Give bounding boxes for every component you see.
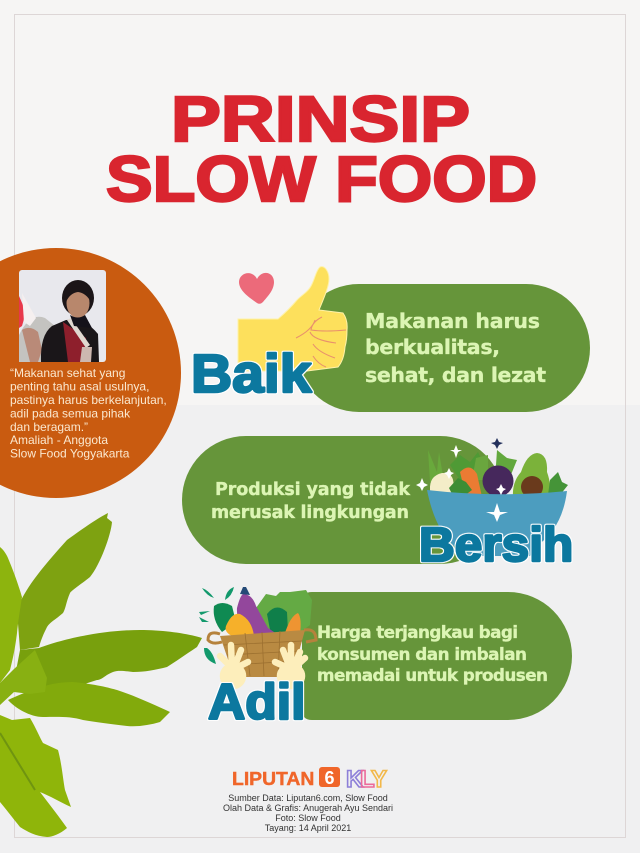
quote text: dan beragam.” [10, 420, 88, 434]
description text: sehat, dan lezat [365, 363, 546, 387]
title: PRINSIP [171, 83, 470, 155]
logo: Liputan6 [232, 767, 340, 790]
icon: vegetable basket [199, 587, 316, 686]
panel: Adil [199, 587, 572, 730]
label: Adil: Adil [208, 674, 305, 730]
pill background [182, 436, 504, 564]
title [106, 83, 537, 215]
pill background [302, 592, 572, 720]
description text: Produksi yang tidak [215, 480, 410, 500]
description text: memadai untuk produsen [317, 665, 548, 685]
quote text: Amaliah - Anggota [10, 433, 108, 447]
credits text [223, 793, 393, 833]
quote text: Slow Food Yogyakarta [10, 446, 130, 460]
photo: Amaliah [19, 270, 106, 362]
description text [365, 309, 546, 387]
logo: KLY [346, 766, 387, 793]
title: SLOW FOOD [106, 144, 537, 215]
sparkles [416, 445, 508, 522]
logo: KLY: L [360, 766, 375, 793]
description text: merusak lingkungan [211, 503, 409, 523]
description text [317, 622, 548, 685]
footer [223, 766, 393, 833]
quote text: pastinya harus berkelanjutan, [10, 393, 167, 407]
panel: Baik [191, 267, 590, 412]
label: Bersih: Bersih [419, 519, 573, 572]
credits text: Foto: Slow Food [275, 813, 341, 823]
credits text: Olah Data & Grafis: Anugerah Ayu Sendari [223, 803, 393, 813]
hands [220, 645, 305, 686]
panel: Bersih [182, 436, 573, 572]
logo: Liputan6: LIPUTAN [232, 769, 314, 790]
decoration: banana leaves [0, 513, 202, 837]
quote text: adil pada semua pihak [10, 406, 131, 420]
logo: Liputan6: 6 [324, 768, 335, 788]
description text: Makanan harus [365, 309, 540, 333]
quote text [10, 366, 167, 460]
credits text: Sumber Data: Liputan6.com, Slow Food [228, 793, 388, 803]
panel: quote circle [0, 248, 181, 498]
label: Baik: Baik [191, 344, 312, 404]
logo: KLY: Y [371, 766, 387, 793]
credits text: Tayang: 14 April 2021 [265, 823, 351, 833]
icon: heart [239, 273, 274, 304]
pill background [295, 284, 590, 412]
description text: berkualitas, [365, 335, 500, 359]
description text: konsumen dan imbalan [317, 644, 527, 664]
quote text: penting tahu asal usulnya, [10, 380, 149, 394]
logo: KLY: K [346, 766, 364, 793]
icon: vegetable bowl [416, 438, 568, 556]
icon: thumbs up [238, 267, 347, 371]
description text [211, 480, 410, 523]
description text: Harga terjangkau bagi [317, 622, 518, 642]
quote text: “Makanan sehat yang [10, 366, 125, 380]
